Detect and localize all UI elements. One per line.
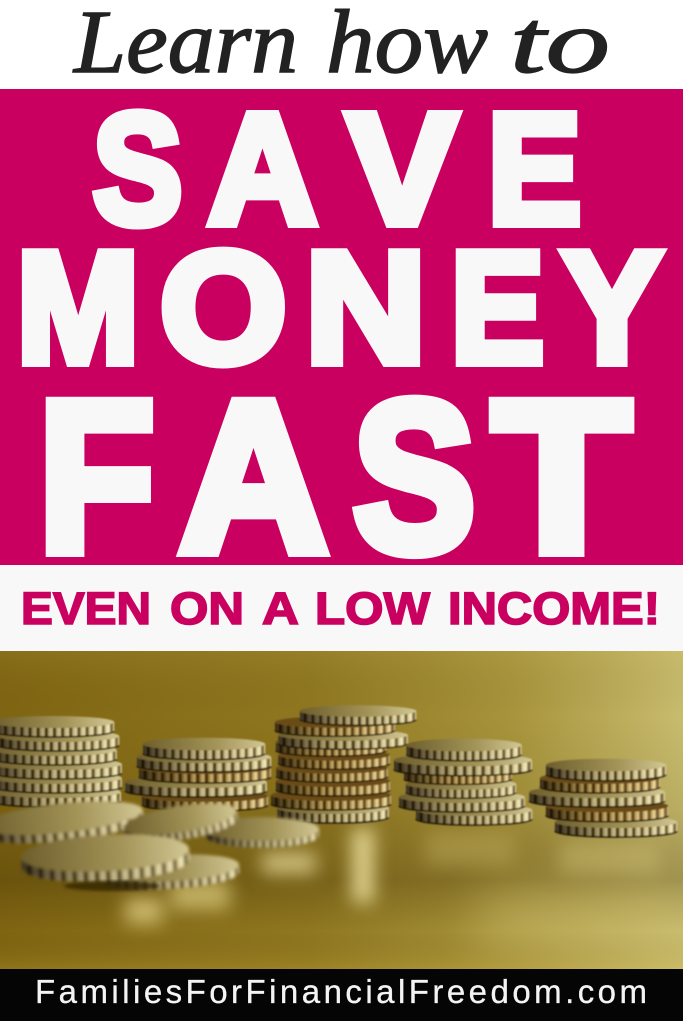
panel: pink title block	[0, 82, 683, 596]
coin reflections	[125, 828, 683, 950]
title word: MONEY: O	[160, 220, 287, 396]
footer URL: FamiliesForFinancialFreedom.com	[35, 973, 647, 1010]
title word: FAST: A	[180, 358, 328, 596]
title word: MONEY: N	[305, 220, 426, 396]
subtitle text: EVEN	[21, 583, 151, 634]
title word: SAVE: V	[347, 82, 457, 257]
stack 4	[394, 739, 532, 825]
title word: SAVE: S	[93, 82, 182, 257]
subtitle text: INCOME!	[448, 583, 660, 634]
title word: FAST: T	[493, 358, 630, 596]
title word: MONEY: Y	[562, 220, 662, 396]
photo: gold coins	[0, 651, 683, 969]
title word: FAST: F	[39, 358, 154, 596]
script heading: Learn how to	[72, 0, 610, 92]
title word: FAST: S	[353, 358, 475, 596]
title word: MONEY: M	[17, 220, 139, 396]
stack 3	[271, 705, 416, 823]
stack 5	[529, 759, 677, 837]
coin shadow	[64, 881, 160, 891]
subtitle band	[0, 565, 683, 651]
stack 1	[0, 716, 122, 807]
subtitle text: LOW	[315, 583, 431, 634]
title word: MONEY: E	[451, 220, 544, 396]
loose coins	[0, 795, 319, 892]
stack 2	[125, 738, 271, 811]
subtitle text: A	[262, 583, 298, 634]
title word: SAVE: E	[488, 82, 581, 257]
footer bar	[0, 969, 683, 1021]
subtitle text: ON	[170, 583, 244, 634]
title word: SAVE: A	[208, 82, 317, 257]
coin stacks	[0, 705, 677, 837]
